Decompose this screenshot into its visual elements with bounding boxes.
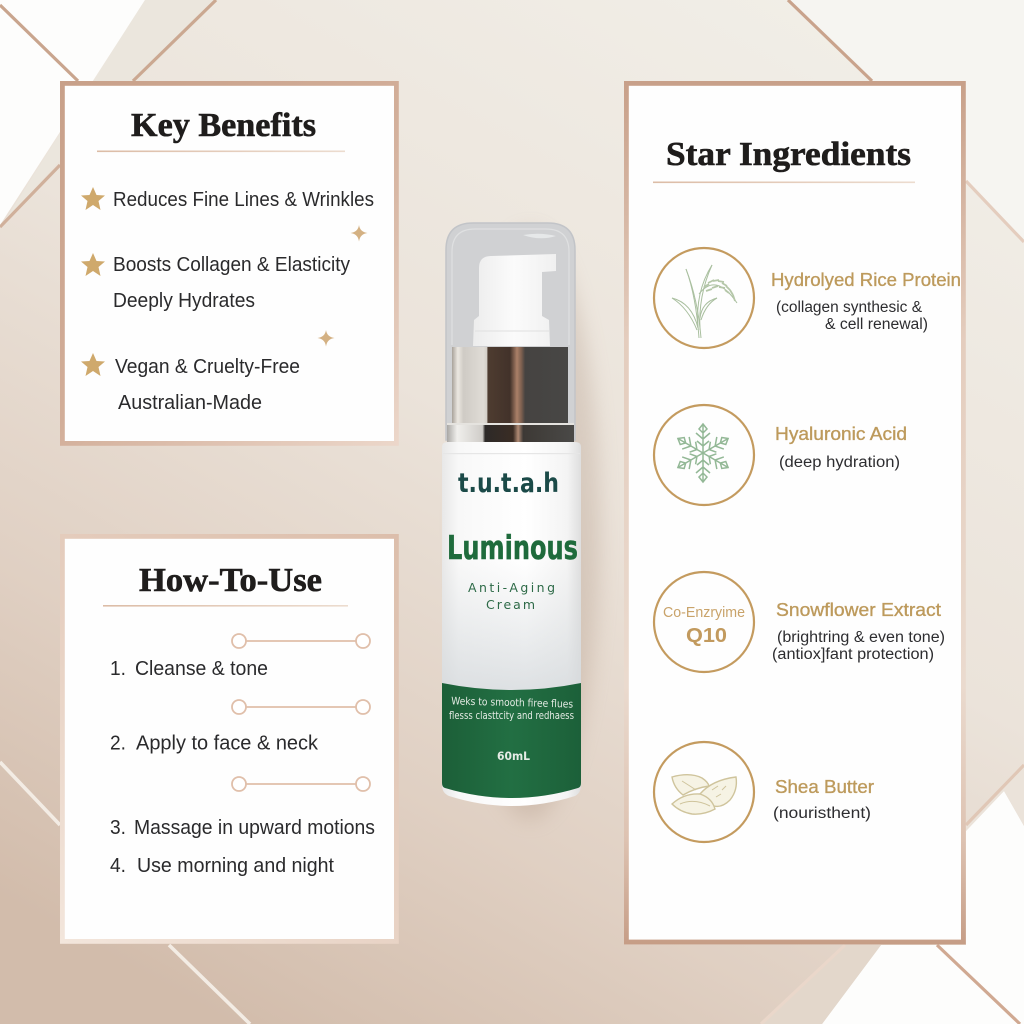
panel: key benefits — [62, 83, 396, 443]
icon: co-enzyme q10 badge — [654, 572, 754, 672]
step 2: Apply to face & neck — [136, 732, 319, 754]
metal collar — [452, 347, 568, 424]
bottle logo: t.u.t.a.h — [458, 468, 559, 499]
bottle subtitle: Anti-Aging — [468, 580, 555, 595]
icon: snowflake — [654, 405, 754, 505]
product bottle — [442, 223, 600, 820]
ingredient: hydrolyed rice protein: (collagen synthesic & — [776, 299, 923, 316]
benefit text 2: Boosts Collagen & Elasticity — [113, 253, 351, 276]
step 1: Cleanse & tone — [135, 657, 268, 680]
bottle band text: Weks to smooth firee flues — [451, 695, 573, 711]
icon: rice plant — [654, 248, 754, 348]
step 4: Use morning and night — [137, 854, 334, 877]
bottle subtitle — [468, 580, 555, 612]
icon: co-enzyme q10 badge: Co-Enzryime — [663, 605, 745, 621]
step 3: 3. — [110, 816, 126, 839]
icon: sparkle 2 — [318, 330, 334, 346]
panel: how to use — [62, 536, 396, 941]
ingredient: snowflower extract — [772, 599, 945, 663]
ingredient: hydrolyed rice protein — [771, 269, 961, 333]
step 3: Massage in upward motions — [134, 816, 375, 839]
ingredient: shea butter — [773, 776, 874, 822]
connector 1 — [232, 634, 370, 648]
ingredient: shea butter: Shea Butter — [775, 776, 874, 797]
step 4: 4. — [110, 854, 126, 877]
connector 2 — [232, 700, 370, 714]
step 2: 2. — [110, 732, 126, 754]
bottle product name: Luminous — [447, 528, 578, 567]
ingredient: hydrolyed rice protein: Hydrolyed Rice Protein — [771, 269, 961, 290]
heading: star ingredients: Star Ingredients — [666, 136, 911, 173]
ingredient: hydrolyed rice protein: & cell renewal) — [825, 316, 928, 333]
panel: star ingredients — [626, 83, 963, 942]
benefit text 4: Vegan & Cruelty-Free — [115, 355, 300, 378]
ingredient: snowflower extract: (antiox]fant protection) — [772, 646, 934, 663]
pump nozzle — [473, 254, 556, 346]
ingredient: hyaluronic acid: Hyaluronic Acid — [775, 423, 907, 444]
icon: star bullet 3 — [81, 353, 105, 376]
ingredient: shea butter: (nouristhent) — [773, 805, 871, 822]
bottle volume: 60mL — [497, 749, 531, 763]
heading: how to use: How-To-Use — [139, 562, 322, 599]
ingredient: snowflower extract: (brightring & even tone) — [777, 629, 945, 646]
bottle band text — [449, 695, 574, 722]
icon: star bullet 2 — [81, 253, 105, 276]
bottle subtitle: Cream — [486, 597, 535, 612]
bottle cap dome — [446, 223, 575, 440]
benefit text 5: Australian-Made — [118, 391, 262, 414]
icon: co-enzyme q10 badge: Q10 — [686, 625, 727, 647]
benefit text 3: Deeply Hydrates — [113, 289, 255, 312]
icon: sparkle 1 — [350, 225, 368, 242]
benefit text 1: Reduces Fine Lines & Wrinkles — [113, 188, 374, 211]
ingredient: hyaluronic acid — [775, 423, 907, 471]
icon: shea nuts — [654, 742, 754, 842]
icon: star bullet 1 — [81, 187, 105, 210]
ingredient: snowflower extract: Snowflower Extract — [776, 599, 941, 620]
bottle body — [442, 442, 581, 806]
heading: key benefits: Key Benefits — [131, 107, 316, 144]
connector 3 — [232, 777, 370, 791]
step 1: 1. — [110, 657, 126, 680]
bottle band text: flesss clasttcity and redhaess — [449, 710, 574, 722]
ingredient: hyaluronic acid: (deep hydration) — [779, 454, 900, 471]
